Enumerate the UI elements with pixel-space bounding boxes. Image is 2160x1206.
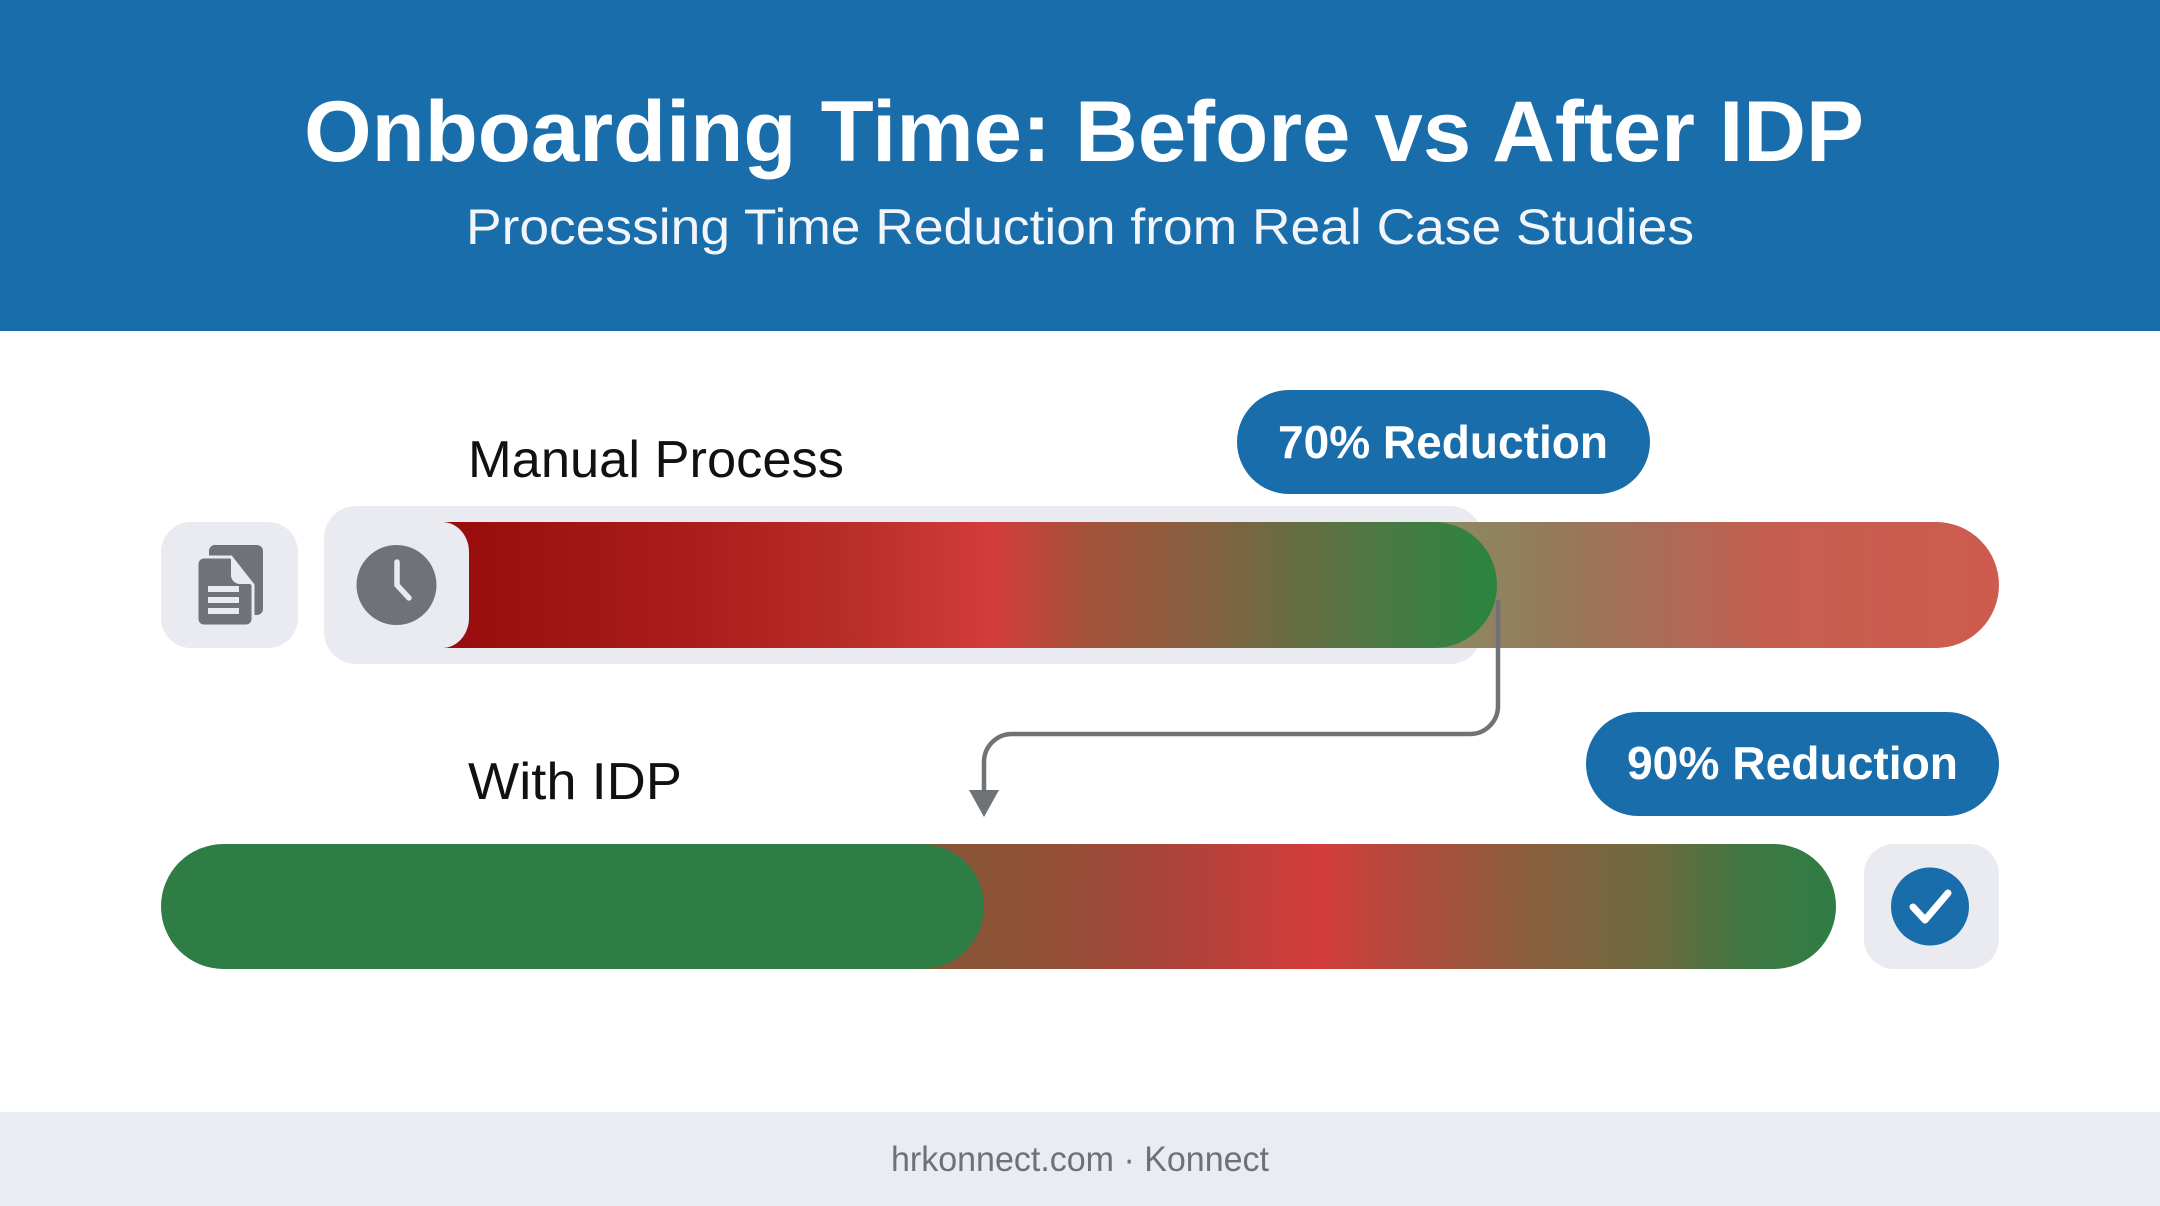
with IDP bar bbox=[161, 844, 1836, 969]
footer bbox=[0, 1112, 2160, 1206]
icon tile: check mark bbox=[1864, 844, 1999, 969]
red to green gradient bar bbox=[860, 844, 1836, 969]
label: manual process: Manual Process bbox=[468, 431, 844, 489]
connector arrow bbox=[969, 600, 1498, 817]
icon tile: documents bbox=[161, 522, 298, 648]
badge: 70% reduction bbox=[1237, 390, 1650, 494]
badge: 70% reduction: 70% Reduction bbox=[1278, 416, 1608, 468]
badge: 90% reduction bbox=[1586, 712, 1999, 816]
icon: clock bbox=[356, 545, 436, 625]
manual process bar bbox=[324, 506, 1999, 664]
clock tile cutout bbox=[370, 522, 469, 648]
green progress segment bbox=[161, 844, 984, 969]
badge: 90% reduction: 90% Reduction bbox=[1627, 737, 1958, 789]
red to green progress bar bbox=[420, 522, 1497, 648]
subtitle: Processing Time Reduction from Real Case Studies bbox=[466, 199, 1694, 255]
title: Onboarding Time: Before vs After IDP bbox=[304, 84, 1864, 180]
header band bbox=[0, 0, 2160, 331]
label: with IDP: With IDP bbox=[468, 753, 682, 811]
light tray behind bar bbox=[324, 506, 1482, 664]
footer: hrkonnect.com · Konnect bbox=[891, 1140, 1269, 1179]
faded remainder of bar bbox=[1300, 522, 1999, 648]
